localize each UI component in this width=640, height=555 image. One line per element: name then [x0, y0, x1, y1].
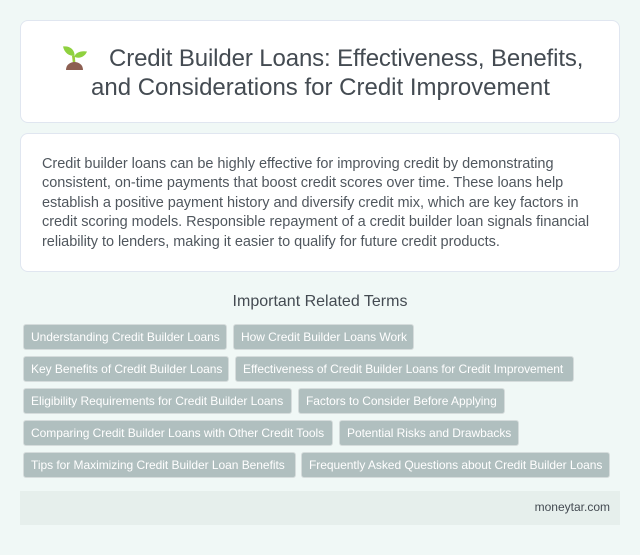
chip	[23, 452, 296, 478]
title: Credit Builder Loans: Effectiveness, Benefits,	[109, 45, 583, 72]
summary paragraph: consistent, on-time payments that boost credit scores over time. These loans help	[42, 175, 563, 191]
summary paragraph: Credit builder loans can be highly effective for improving credit by demonstrating	[42, 156, 553, 172]
related terms chips	[23, 324, 610, 478]
icon: sprout	[63, 46, 87, 70]
chip	[23, 388, 292, 414]
chip: Key Benefits of Credit Builder Loans	[31, 362, 222, 376]
summary paragraph: establish a positive payment history and diversify credit mix, which are key factors in	[42, 194, 578, 210]
chip	[23, 324, 227, 350]
chip: Frequently Asked Questions about Credit Builder Loans	[309, 458, 602, 472]
chip: Eligibility Requirements for Credit Builder Loans	[31, 394, 283, 408]
chip	[298, 388, 505, 414]
summary paragraph	[42, 156, 589, 250]
chip: How Credit Builder Loans Work	[241, 330, 407, 344]
chip: Understanding Credit Builder Loans	[31, 330, 220, 344]
chip: Comparing Credit Builder Loans with Other Credit Tools	[31, 426, 324, 440]
chip: Potential Risks and Drawbacks	[347, 426, 511, 440]
chip	[233, 324, 414, 350]
chip	[301, 452, 610, 478]
title	[91, 45, 583, 101]
chip: Factors to Consider Before Applying	[306, 394, 497, 408]
summary paragraph: reliability to lenders, making it easier to qualify for future credit products.	[42, 234, 500, 250]
chip: Effectiveness of Credit Builder Loans for Credit Improvement	[243, 362, 563, 376]
chip	[23, 356, 229, 382]
panel: summary text	[20, 133, 620, 272]
heading: important related terms: Important Related Terms	[233, 293, 407, 310]
chip	[23, 420, 333, 446]
summary paragraph: credit scoring models. Responsible repayment of a credit builder loan signals financial	[42, 214, 589, 230]
title: and Considerations for Credit Improvement	[91, 74, 550, 101]
chip: Tips for Maximizing Credit Builder Loan Benefits	[31, 458, 285, 472]
chip	[235, 356, 574, 382]
footer source text: moneytar.com	[535, 500, 610, 514]
panel: title card	[20, 20, 620, 123]
chip	[339, 420, 519, 446]
footer bar	[20, 491, 620, 525]
